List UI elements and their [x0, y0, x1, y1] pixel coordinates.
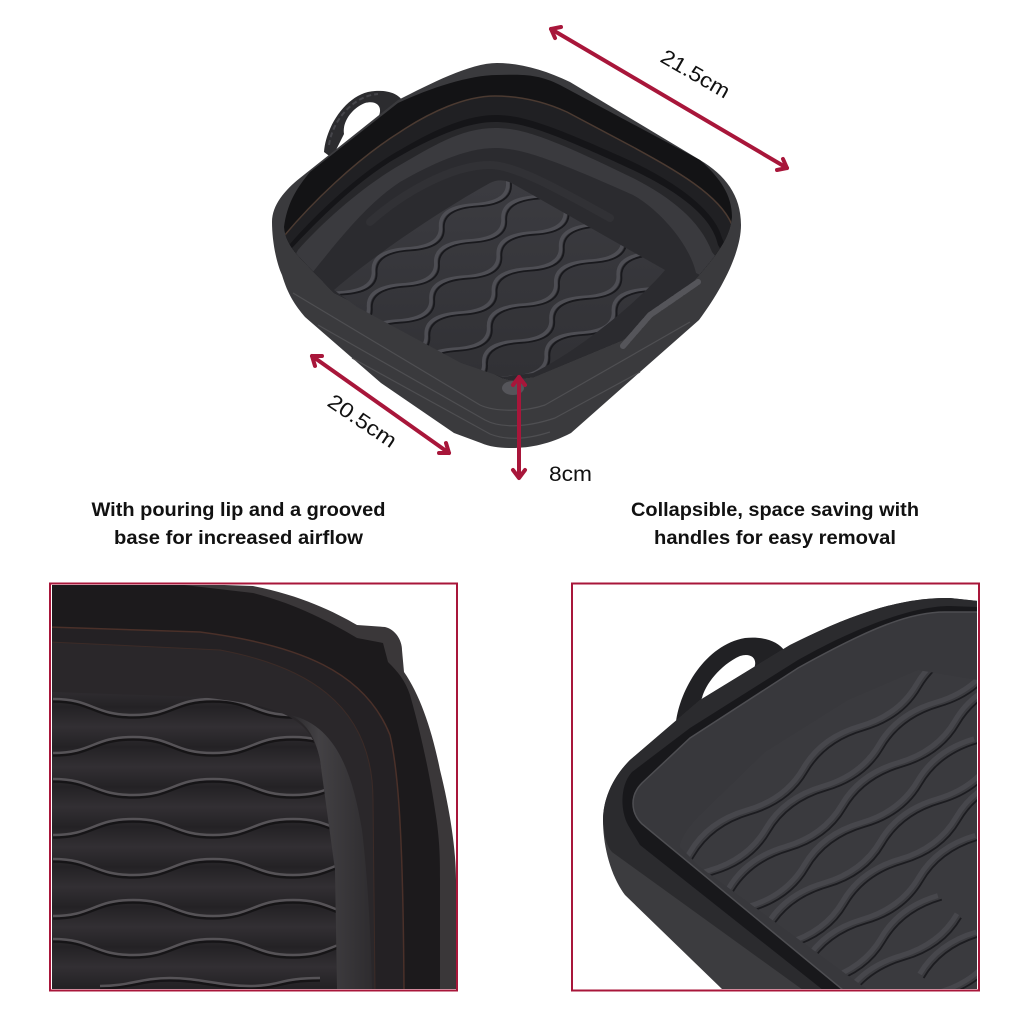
body fold lines — [293, 293, 690, 438]
groove — [622, 606, 978, 990]
outer rim — [184, 585, 456, 989]
label: 20.5cm: 20.5cm — [323, 390, 401, 453]
groove — [290, 115, 724, 248]
arrow: length 20.5cm — [312, 356, 449, 453]
arrow: width 21.5cm — [551, 27, 787, 170]
caption: collapsible: Collapsible, space saving with — [631, 500, 919, 521]
inner wall — [50, 642, 375, 990]
base floor — [314, 148, 699, 380]
main product: silicone air fryer liner — [270, 60, 750, 448]
panel border — [572, 584, 979, 990]
pouring lip — [502, 381, 524, 395]
light band — [296, 128, 715, 274]
panel border — [50, 584, 457, 990]
wave base — [52, 698, 337, 989]
caption: collapsible — [631, 500, 919, 549]
rim top — [603, 598, 978, 990]
lip of base — [298, 718, 364, 989]
tray body — [272, 63, 741, 448]
caption: collapsible: handles for easy removal — [654, 528, 896, 549]
tray opening with collapsible folds — [284, 74, 732, 380]
panel: collapsed tray with handle close-up — [571, 582, 980, 992]
caption: pouring lip — [92, 500, 386, 549]
handle — [676, 638, 784, 728]
collapsed body side — [603, 598, 978, 990]
outer fold — [285, 95, 732, 244]
right handle — [623, 282, 698, 346]
left handle — [324, 91, 403, 158]
label: 8cm: 8cm — [549, 463, 592, 486]
caption: pouring lip: base for increased airflow — [114, 528, 363, 549]
panel: pouring lip close-up — [50, 583, 458, 991]
inner dark wall — [50, 583, 440, 991]
wave base — [686, 671, 977, 989]
plate — [633, 612, 978, 990]
grooved wave base — [334, 180, 664, 377]
label: 21.5cm: 21.5cm — [656, 45, 734, 103]
arrow: height 8cm — [513, 377, 525, 478]
caption: pouring lip: With pouring lip and a grooved — [92, 500, 386, 521]
fold band with brown edge — [50, 627, 404, 990]
